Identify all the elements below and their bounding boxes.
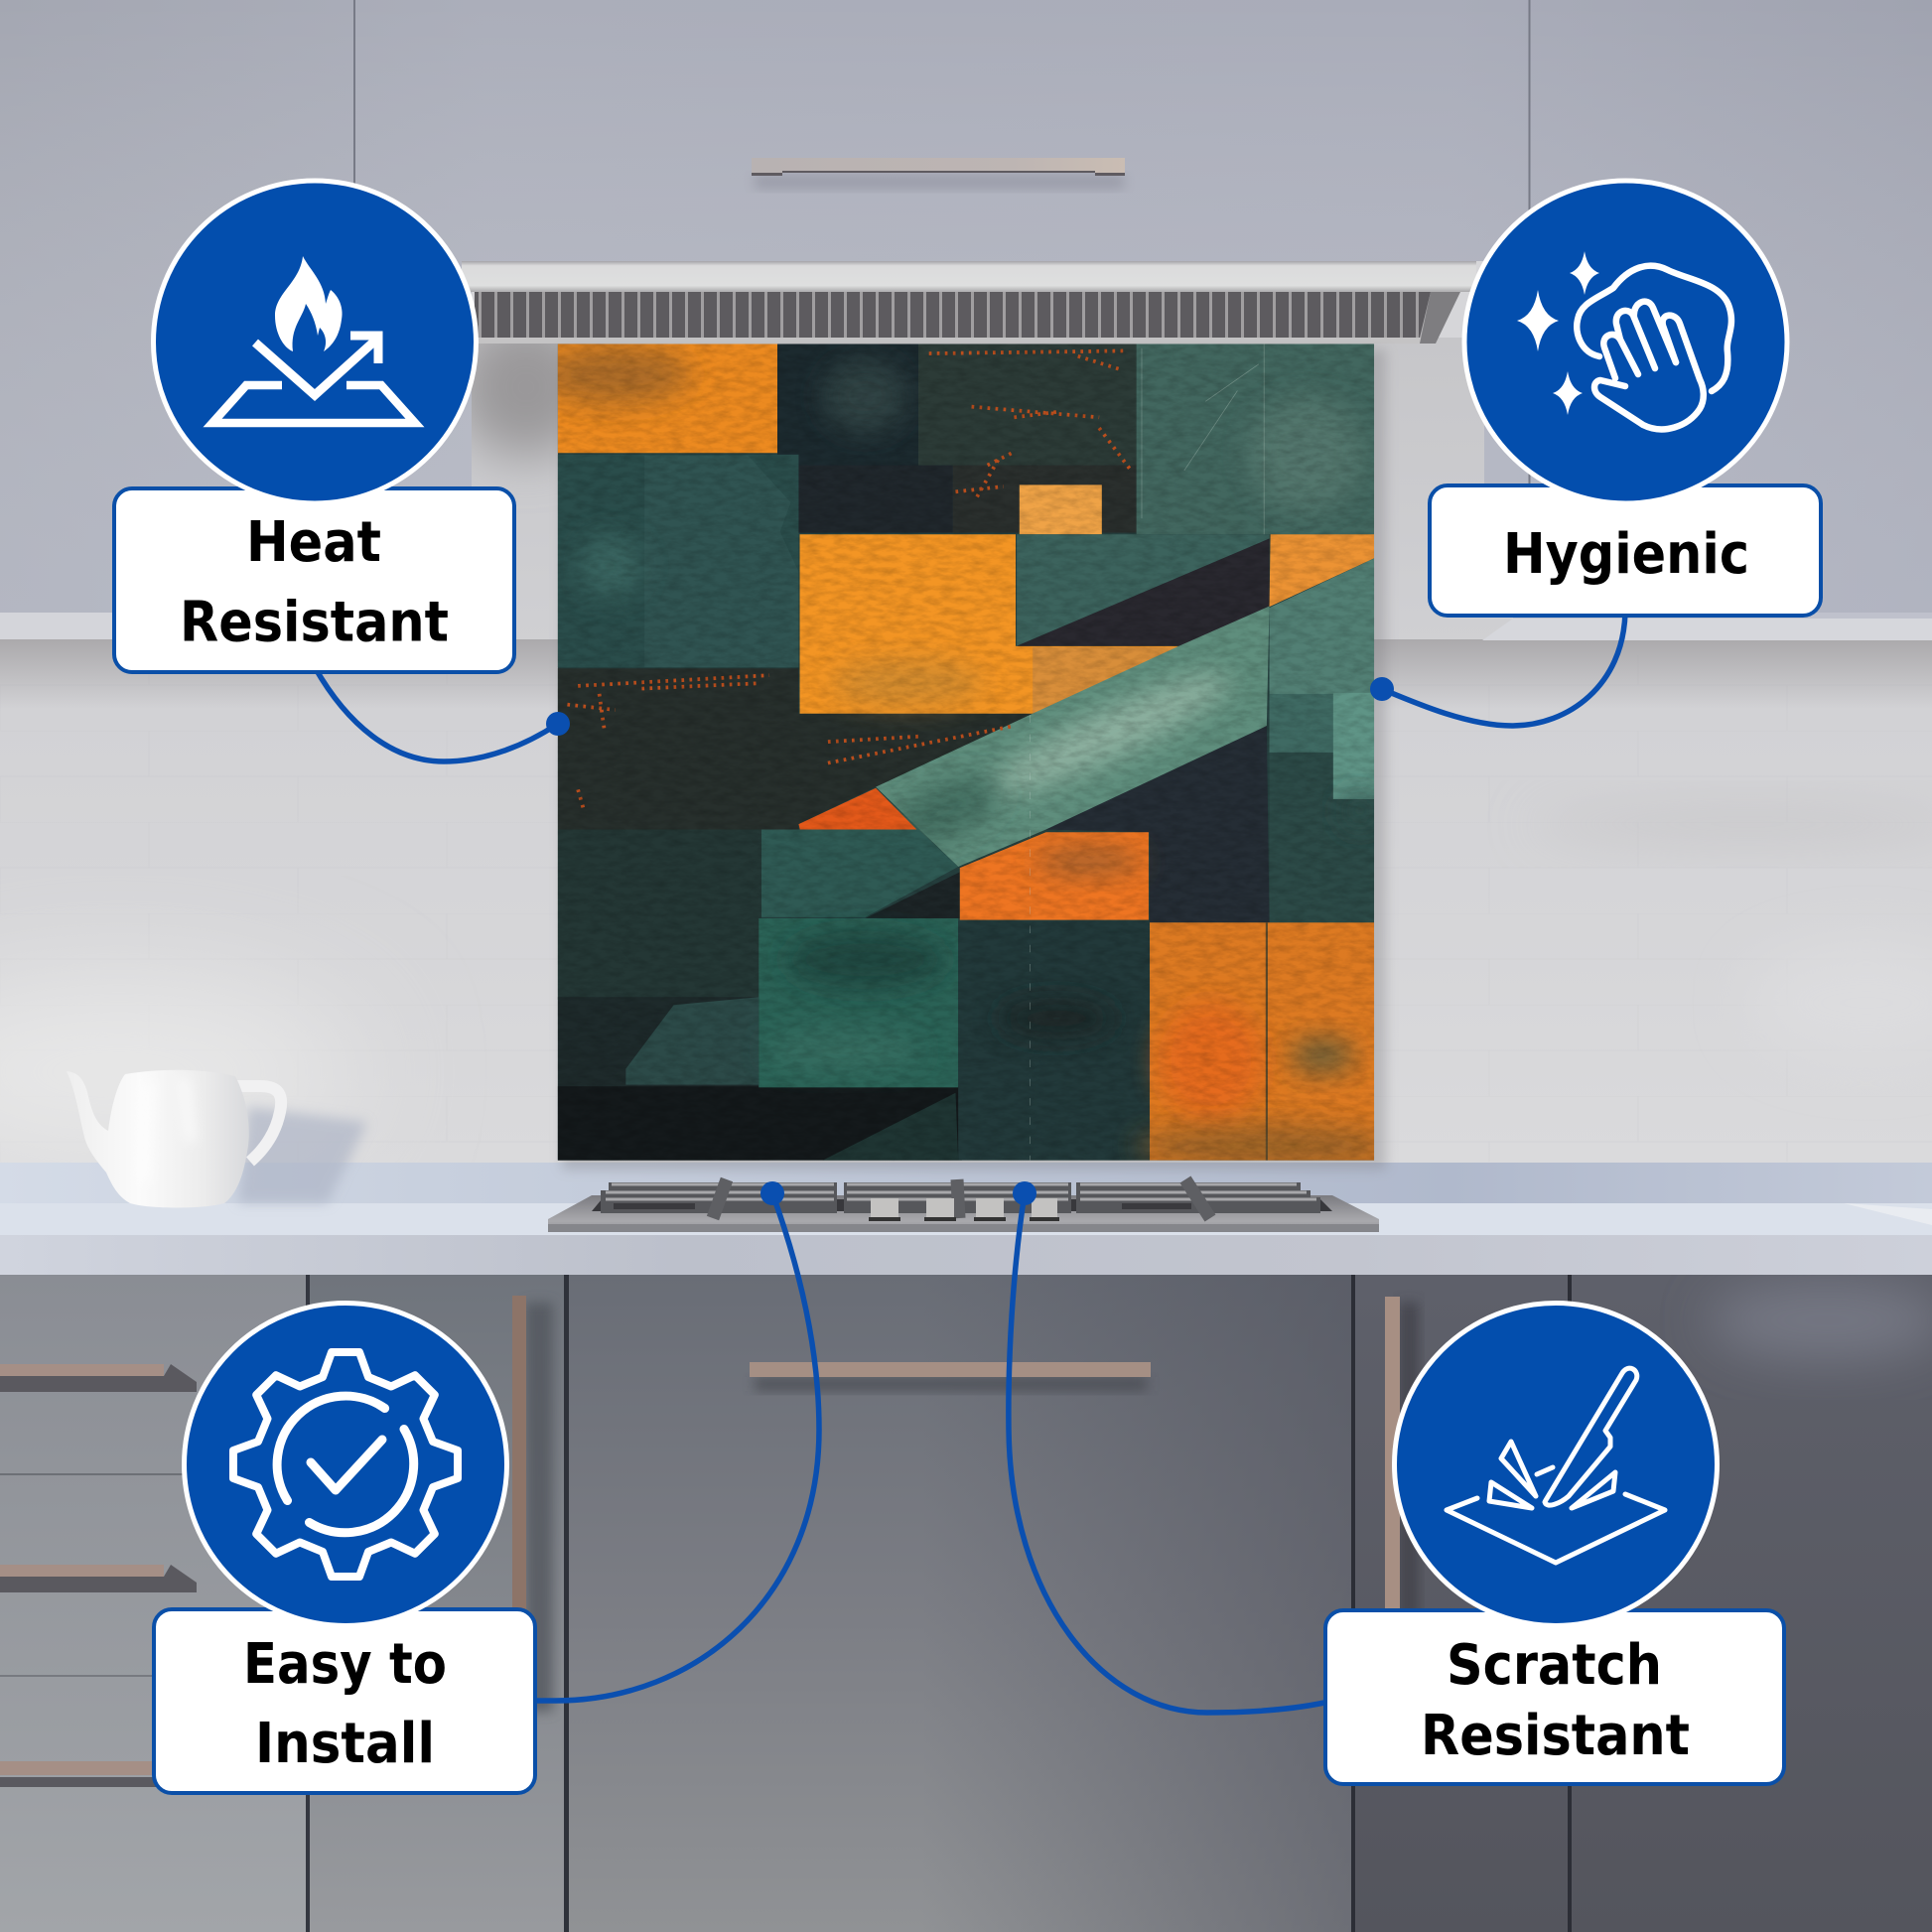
small orange block (1020, 484, 1102, 534)
hob knobs (869, 1198, 1059, 1221)
bottom centre block (823, 921, 1150, 1161)
red orange triangle (798, 788, 918, 831)
gas hob (548, 1179, 1379, 1232)
tiled wall (0, 338, 1932, 1172)
upper cabinets (0, 0, 1932, 640)
paint grain overlay (558, 344, 1374, 1161)
wall tile lines (0, 655, 1932, 1162)
splashback panel shadow (562, 349, 1386, 1170)
label box (114, 488, 514, 672)
label text: Easy to (243, 1632, 447, 1697)
label text: Resistant (1421, 1704, 1690, 1768)
connector: hygienic (1370, 613, 1625, 726)
teal block top right (1137, 344, 1374, 534)
icon: wiping hand with sparkles (1517, 251, 1731, 429)
burner grates (601, 1179, 1320, 1218)
base cabinets (0, 1275, 1932, 1932)
callout: scratch resistant (1325, 1303, 1784, 1784)
icon badge (185, 1303, 506, 1626)
scratch highlights (1030, 344, 1264, 1161)
callout: heat resistant (114, 181, 514, 672)
label text: Scratch (1447, 1633, 1662, 1698)
callout: hygienic (1430, 181, 1821, 616)
orange block top left (541, 344, 777, 453)
connector dot (546, 712, 570, 736)
connector: easy to install (537, 1181, 819, 1701)
abstract painted splashback panel (541, 344, 1392, 1168)
connector: scratch resistant (1009, 1181, 1324, 1713)
connector dot (760, 1181, 784, 1205)
connector dot (1013, 1181, 1036, 1205)
green square upper (761, 830, 958, 917)
big orange block (800, 534, 1178, 714)
orange corner block (1270, 534, 1374, 607)
rust speckles (567, 350, 1131, 808)
connector: heat resistant (315, 667, 570, 761)
connector dot (1370, 677, 1394, 701)
lower left dark block (558, 830, 761, 1000)
green square lower (759, 918, 958, 1087)
teapot (67, 1070, 367, 1207)
light green diagonal band (876, 607, 1270, 867)
centre drawer handle (750, 1362, 1151, 1391)
wall lighting (0, 318, 1932, 1162)
icon badge (1464, 181, 1787, 503)
vertical door handle left (512, 1296, 553, 1712)
icon: knife scratching surface (1447, 1368, 1665, 1563)
label box (1325, 1610, 1784, 1784)
icon: gear with check (233, 1352, 458, 1577)
label box (154, 1609, 535, 1793)
right teal column (1270, 558, 1378, 922)
callout: easy to install (154, 1303, 535, 1793)
label text: Install (255, 1712, 435, 1776)
icon badge (1394, 1303, 1718, 1626)
icon: flame on surface (212, 256, 415, 423)
navy block below band (1046, 726, 1270, 922)
dark navy block (777, 344, 953, 533)
orange middle block (960, 832, 1149, 920)
label box (1430, 485, 1821, 616)
vertical door handle right (1385, 1297, 1419, 1620)
dark rust block left (558, 668, 1033, 830)
upper cabinet handle (752, 158, 1125, 189)
bottom left dark field (558, 997, 962, 1161)
dark green rust block (918, 365, 929, 427)
drawer handles (0, 1364, 197, 1787)
countertop (0, 1163, 1932, 1275)
orange block bottom right (1137, 922, 1392, 1168)
cooker hood (462, 261, 1476, 344)
teal wedge (1017, 534, 1270, 646)
left green block (558, 455, 798, 667)
label text: Hygienic (1503, 522, 1749, 587)
navy wedge (1017, 538, 1270, 646)
label text: Resistant (180, 590, 449, 655)
icon badge (153, 181, 477, 503)
cabinet bottom rails (0, 613, 477, 639)
dark wedge (865, 872, 960, 918)
label text: Heat (246, 510, 381, 575)
